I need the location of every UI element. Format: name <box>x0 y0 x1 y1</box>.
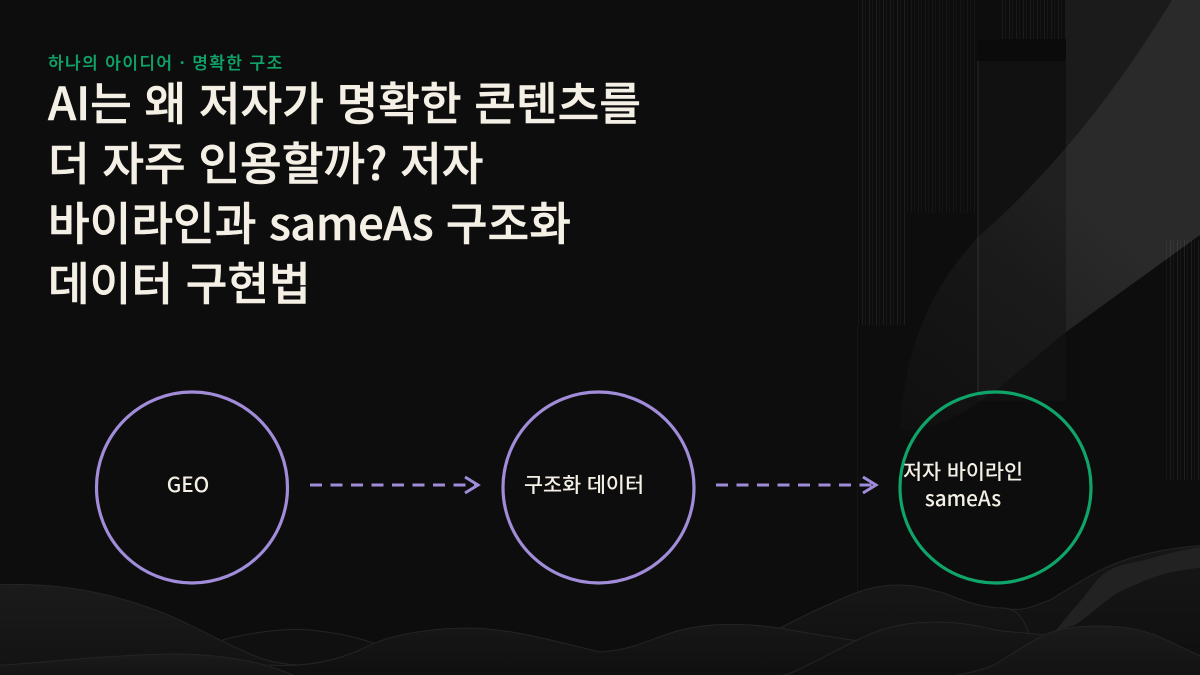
hills <box>0 545 1200 675</box>
title: 데이터 구현법 <box>48 248 311 314</box>
arrow: structured data to author byline <box>716 477 876 493</box>
ribbon <box>900 0 1200 430</box>
arrow: GEO to structured data <box>310 477 478 493</box>
circle: GEO <box>96 392 288 583</box>
circle: structured data <box>503 392 694 583</box>
label: author byline sameAs: 저자 바이라인 <box>903 455 1023 485</box>
title: AI는 왜 저자가 명확한 콘텐츠를 <box>48 68 641 134</box>
label: author byline sameAs <box>903 455 1023 512</box>
title: 바이라인과 sameAs 구조화 <box>48 188 571 254</box>
title: 더 자주 인용할까? 저자 <box>48 128 483 194</box>
circle: author byline sameAs <box>900 392 1091 583</box>
label: structured data: 구조화 데이터 <box>524 468 644 498</box>
label: author byline sameAs: sameAs <box>925 482 1001 512</box>
eyebrow: 하나의 아이디어 · 명확한 구조 <box>48 49 284 74</box>
title <box>48 68 641 314</box>
label: GEO: GEO <box>167 468 209 498</box>
